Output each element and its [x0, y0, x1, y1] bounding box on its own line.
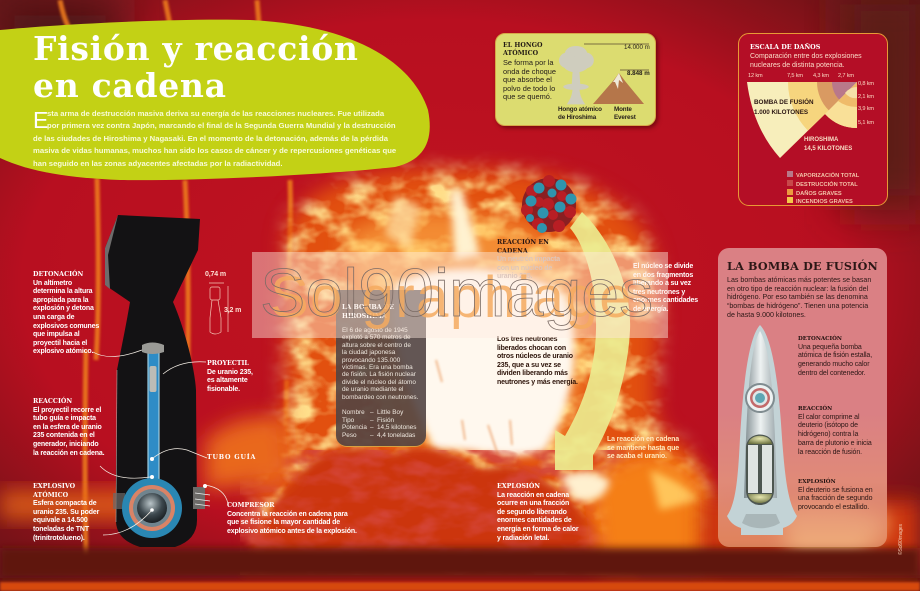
sector label: hiroshima: [804, 136, 852, 152]
bomb label: proyectil: PROYECTIL: [207, 360, 249, 367]
hiroshima text: El 6 de agosto de 1945: [342, 327, 408, 334]
step: explosión: enormes cantidades de: [497, 517, 572, 524]
step: explosión: y radiación letal.: [497, 535, 549, 542]
bomb label: explosivo atómico: [32, 483, 100, 542]
fusion step: reacción: [798, 404, 872, 456]
hiroshima heading: HIROSHIMA: [342, 313, 387, 320]
fusion step: explosión: una fracción de segundo: [798, 495, 872, 502]
step: la reacción se mantiene: La reacción en cadena: [607, 436, 679, 443]
legend: DESTRUCCIÓN TOTAL: [796, 182, 858, 188]
dimension label: length: 3,2 m: [224, 307, 241, 314]
hongo text: polvo de todo lo: [503, 84, 555, 93]
bomb label: proyectil: es altamente: [207, 377, 248, 384]
fusion step: explosión: El deuterio se fusiona en: [798, 487, 873, 494]
hiroshima text: [342, 327, 418, 401]
chart: mushroom vs Everest: [559, 44, 649, 104]
escala text: Comparación entre dos explosiones: [750, 53, 862, 60]
step: explosión: EXPLOSIÓN: [497, 483, 540, 490]
depth labels: [858, 81, 874, 126]
hiroshima heading: LA BOMBA DE: [342, 304, 394, 311]
title: [33, 29, 359, 105]
bomb label: reacción: El proyectil recorre el: [33, 407, 101, 414]
panel: la bomba de Hiroshima: 14,5 kilotones: [377, 424, 416, 431]
credit: ©Sol90images: [898, 524, 904, 555]
hongo heading: EL HONGO: [503, 42, 542, 49]
hongo text: que se quemó.: [503, 92, 552, 101]
step: reacción en cadena: [497, 238, 560, 280]
panel: la bomba de fusión: [718, 248, 887, 547]
hiroshima data table: Tipo: [342, 417, 354, 424]
depth labels: 2,1 km: [858, 94, 874, 100]
fusion heading: LA BOMBA DE FUSIÓN: [727, 259, 878, 273]
hiroshima text: altura sobre el centro de: [342, 342, 411, 349]
step: explosión: energía en forma de calor: [497, 526, 578, 533]
step: los tres neutrones: Los tres neutrones: [497, 336, 557, 343]
hiroshima text: víctimas. Era una bomba: [342, 364, 413, 371]
depth labels: 3,9 km: [858, 106, 874, 112]
legend: DAÑOS GRAVES: [796, 191, 842, 197]
fusion intro: de hasta 9.000 kilotones.: [727, 311, 806, 319]
hiroshima text: bombardeo con neutrones.: [342, 394, 418, 401]
fusion step: explosión: [798, 478, 873, 511]
fusion intro: en otro tipo de reacción nuclear: la fusión del: [727, 285, 868, 293]
intro text: sta arma de destrucción masiva deriva su energía de las reacciones nucleares. Fue utilizada: [47, 109, 384, 118]
step: los tres neutrones: 235, que a su vez se: [497, 362, 561, 369]
escala heading: ESCALA DE DAÑOS: [750, 43, 820, 51]
panel: la bomba de Hiroshima: –: [370, 409, 374, 416]
step: los tres neutrones: neutrones y más energía.: [497, 379, 578, 386]
hiroshima text: de uranio mediante el: [342, 386, 403, 393]
bomb label: proyectil: De uranio 235,: [207, 369, 253, 376]
step: reacción en cadena: con un núcleo de: [497, 265, 552, 272]
fusion step: explosión: provocando el estallido.: [798, 504, 869, 511]
fusion step: detonación: Una pequeña bomba: [798, 344, 862, 351]
hongo text: que absorbe el: [503, 75, 552, 84]
step: los tres neutrones: liberados chocan con: [497, 345, 566, 352]
bomb label: reacción: generador, iniciando: [33, 441, 98, 448]
hongo text: [503, 58, 556, 101]
bomb label: detonación: DETONACIÓN: [33, 271, 83, 278]
hiroshima text: de fisión. La fisión nuclear: [342, 371, 416, 378]
bomb label: explosivo atómico: (trinitrotolueno).: [33, 535, 85, 542]
hiroshima text: divide el núcleo del átomo: [342, 379, 416, 386]
title: Fisión y reacción: [33, 29, 359, 68]
hiroshima text: la ciudad japonesa: [342, 349, 395, 356]
fusion intro: [727, 276, 871, 319]
height label: 14.000 m: 14.000 m: [624, 44, 650, 51]
step: el núcleo se divide: de energía.: [633, 306, 668, 313]
bomb label: detonación: [33, 270, 99, 355]
fusion step: reacción: REACCIÓN: [798, 406, 832, 412]
bomb label: detonación: explosivos comunes: [33, 323, 99, 330]
step: reacción en cadena: REACCIÓN EN: [497, 239, 549, 246]
bomb label: compresor: [227, 502, 357, 535]
caption: everest: [614, 106, 636, 121]
panel: title blob: [0, 20, 430, 180]
bomb label: tubo guía: TUBO GUÍA: [207, 454, 256, 461]
bomb label: compresor: COMPRESOR: [227, 502, 275, 509]
height label: 8.848 m: 8.848 m: [627, 70, 650, 77]
step: los tres neutrones: [497, 336, 578, 386]
fusion step: reacción: deuterio (isótopo de: [798, 422, 858, 429]
damage radius labels: 4,3 km: [813, 73, 829, 79]
step: la reacción se mantiene: se acaba el uranio.: [607, 453, 667, 460]
sector label: hiroshima: 14,5 KILOTONES: [804, 146, 852, 152]
damage radius labels: 12 km: [748, 73, 762, 79]
bomb label: proyectil: [207, 360, 253, 393]
panel: el hongo atómico: [495, 33, 656, 126]
depth labels: 0,8 km: [858, 81, 874, 87]
hiroshima data table: Peso: [342, 432, 357, 439]
fusion step: reacción: la reacción de fusión.: [798, 449, 862, 456]
bomb label: reacción: REACCIÓN: [33, 398, 72, 405]
intro text: han seguido en las zonas adyacentes afectadas por la radiactividad.: [33, 159, 283, 168]
chart: damage radius sectors: [747, 82, 857, 158]
legend: [787, 171, 860, 205]
bomb label: detonación: explosión y detona: [33, 305, 94, 312]
step: el núcleo se divide: liberando a su vez: [633, 280, 691, 287]
bomb label: reacción: [33, 396, 104, 457]
lower cloud lobes: [240, 448, 640, 575]
panel: la bomba de Hiroshima: Little Boy: [377, 409, 403, 416]
step: la reacción se mantiene: [607, 436, 680, 460]
watermark band: [252, 252, 668, 338]
fusion step: detonación: dentro del contenedor.: [798, 370, 865, 377]
step: el núcleo se divide: tres neutrones y: [633, 289, 685, 296]
bomb label: explosivo atómico: toneladas de TNT: [33, 526, 89, 533]
depth labels: 5,1 km: [858, 120, 874, 126]
bomb label: detonación: explosivo atómico.: [33, 348, 93, 355]
panel: la bomba de Hiroshima: [336, 290, 426, 447]
intro text: [33, 107, 396, 168]
fusion step: detonación: generando mucho calor: [798, 361, 869, 368]
bomb label: detonación: Un altímetro: [33, 280, 72, 287]
panel: la bomba de Hiroshima: –: [370, 432, 374, 439]
hiroshima text: provocando 135.000: [342, 357, 400, 364]
bomb label: compresor: explosivo atómico antes de la explosión.: [227, 528, 357, 535]
bomb label: proyectil: fisionable.: [207, 386, 240, 393]
hiroshima text: explotó a 570 metros de: [342, 334, 411, 341]
fusion step: detonación: DETONACIÓN: [798, 336, 842, 342]
dimension label: width: 0,74 m: [205, 271, 226, 278]
fusion step: detonación: [798, 334, 872, 377]
caption: everest: Monte: [614, 106, 632, 113]
bomb label: explosivo atómico: Esfera compacta de: [33, 500, 96, 507]
panel: escala de daños: [738, 33, 888, 206]
step: el núcleo se divide: [633, 262, 698, 313]
step: explosión: [497, 482, 578, 542]
watermark orange text: So graphiage: [270, 265, 633, 330]
damage radius labels: [748, 73, 854, 79]
hongo heading: [502, 42, 542, 57]
bomb label: reacción: en la esfera de uranio: [33, 424, 102, 431]
sector label: bomba de fusión: BOMBA DE FUSIÓN: [754, 99, 814, 106]
hongo text: onda de choque: [503, 67, 556, 76]
panel: la bomba de Hiroshima: –: [370, 417, 374, 424]
bomb label: reacción: 235 contenida en el: [33, 432, 95, 439]
step: explosión: ocurre en una fracción: [497, 500, 569, 507]
step: reacción en cadena: CADENA: [497, 248, 528, 255]
caption: hongo: de Hiroshima: [558, 114, 596, 121]
panel: la bomba de Hiroshima: 4,4 toneladas: [377, 432, 415, 439]
damage radius labels: 2,7 km: [838, 73, 854, 79]
fusion step: reacción: El calor comprime al: [798, 414, 859, 421]
bomb label: reacción: la reacción en cadena.: [33, 450, 104, 457]
fusion intro: hidrógeno. Por eso también se las denomina: [727, 293, 868, 301]
bomb label: compresor: que se fisione la mayor cantidad de: [227, 519, 340, 526]
sector label: bomba de fusión: 1.000 KILOTONES: [754, 109, 808, 116]
step: los tres neutrones: dividen liberando más: [497, 370, 568, 377]
damage radius labels: 7,5 km: [787, 73, 803, 79]
intro text: por primera vez contra Japón, marcando el final de la Segunda Guerra Mundial y la destrucción: [47, 121, 396, 130]
bomb label: reacción: tubo guía e impacta: [33, 415, 96, 422]
step: reacción en cadena: Un neutrón impacta: [497, 256, 560, 263]
caption: everest: Everest: [614, 114, 636, 121]
intro text: masiva de vidas humanas, muchos han sido los casos de cáncer y de repercusiones genéticas que: [33, 146, 396, 155]
step: el núcleo se divide: en dos fragmentos: [633, 272, 693, 279]
sector label: hiroshima: HIROSHIMA: [804, 137, 838, 143]
sector label: bomba de fusión: [754, 98, 814, 116]
panel: la bomba de Hiroshima: Fisión: [377, 417, 394, 424]
bomb label: detonación: apropiada para la: [33, 297, 88, 304]
step: el núcleo se divide: El núcleo se divide: [633, 263, 693, 270]
caption: hongo: Hongo atómico: [558, 106, 602, 113]
fusion intro: “bombas de hidrógeno”. Tienen una potencia: [727, 302, 868, 310]
panel: la bomba de Hiroshima: –: [370, 424, 374, 431]
bomb label: detonación: determina la altura: [33, 288, 92, 295]
escala text: nucleares de distinta potencia.: [750, 62, 845, 69]
legend: VAPORIZACIÓN TOTAL: [796, 173, 859, 179]
fusion bomb cutaway: [727, 325, 797, 535]
hongo heading: ATÓMICO: [503, 50, 538, 57]
intro text: de las ciudades de Hiroshima y Nagasaki. En el momento de la detonación, además de la pérdida: [33, 134, 388, 143]
hongo text: Se forma por la: [503, 58, 554, 67]
hiroshima data table: Potencia: [342, 424, 367, 431]
hiroshima data table: Nombre: [342, 409, 365, 416]
escala text: [750, 52, 862, 69]
bomb label: explosivo atómico: ATÓMICO: [33, 492, 68, 499]
fusion step: reacción: hidrógeno) contra la: [798, 431, 858, 438]
intro text: E: [33, 107, 48, 133]
fireball: [239, 154, 718, 546]
legend: INCENDIOS GRAVES: [796, 199, 853, 205]
fusion step: reacción: barra de plutonio e inicia: [798, 440, 872, 447]
bomb label: detonación: proyectil hacia el: [33, 340, 87, 347]
step: reacción en cadena: uranio 235.: [497, 273, 532, 280]
fusion step: explosión: EXPLOSIÓN: [798, 479, 836, 485]
bomb label: detonación: una carga de: [33, 314, 74, 321]
bomb label: explosivo atómico: equivale a 14.500: [33, 517, 88, 524]
fusion intro: Las bombas atómicas más potentes se basan: [727, 276, 871, 284]
bomb label: explosivo atómico: EXPLOSIVO: [33, 483, 75, 490]
title: en cadena: [33, 66, 227, 105]
hiroshima heading: [342, 304, 394, 320]
bomb label: detonación: que impulsa al: [33, 331, 80, 338]
icon: uranium nucleus: [521, 175, 576, 233]
step: los tres neutrones: otros núcleos de uranio: [497, 353, 573, 360]
step: el núcleo se divide: enormes cantidades: [633, 297, 698, 304]
step: explosión: de segundo liberando: [497, 509, 567, 516]
caption: hongo: [558, 106, 602, 121]
fusion step: detonación: atómica de fisión estalla,: [798, 352, 872, 359]
hiroshima data table: [342, 409, 416, 439]
bomb label: compresor: Concentra la reacción en cadena para: [227, 511, 348, 518]
step: explosión: La reacción en cadena: [497, 492, 569, 499]
flame streaks: [60, 0, 291, 570]
step: la reacción se mantiene: se mantiene hasta que: [607, 445, 679, 452]
bomb label: explosivo atómico: uranio 235. Su poder: [33, 509, 99, 516]
